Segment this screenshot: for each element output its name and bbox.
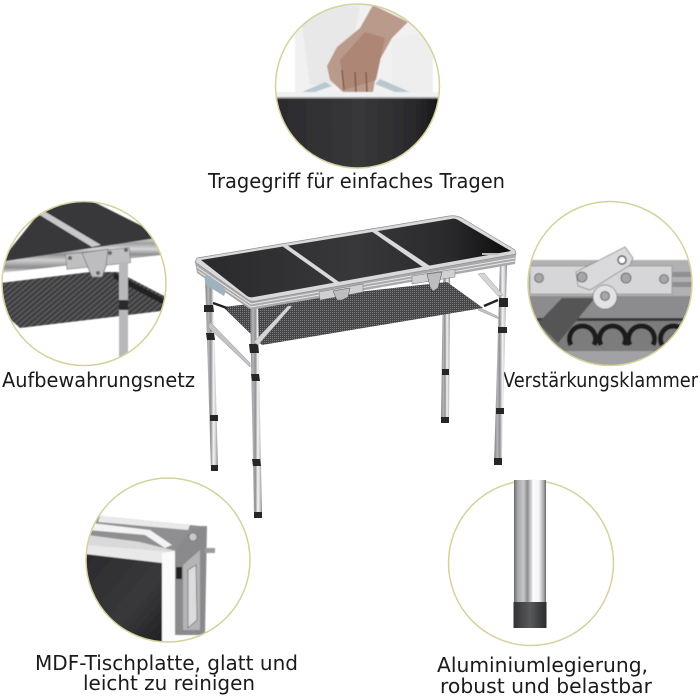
table frame [195,254,516,309]
caption: aluminium pole [437,653,653,698]
logo [482,253,498,255]
caption: carrying handle: Tragegriff für einfaches Tragen [207,169,505,193]
front legs [249,262,508,518]
detail circle: storage net [0,195,170,372]
rear left rail [208,322,250,367]
braces [254,306,292,345]
latches [319,284,363,300]
back legs [204,275,450,471]
caption: MDF tabletop: leicht zu reinigen [83,671,255,695]
caption: MDF tabletop: MDF-Tischplatte, glatt und [35,651,298,675]
detail circle: carrying handle [274,3,440,169]
caption: storage net: Aufbewahrungsnetz [2,368,195,392]
caption: MDF tabletop [35,651,298,695]
folding table product image [195,216,516,518]
detail circle: MDF tabletop [85,478,250,645]
caption: aluminium pole: robust und belastbar [440,674,653,698]
caption: aluminium pole: Aluminiumlegierung, [437,653,648,677]
storage net [223,282,483,345]
detail circle: aluminium pole [448,480,614,646]
right rail [478,308,499,319]
detail circle: reinforcement clamp [525,202,700,371]
